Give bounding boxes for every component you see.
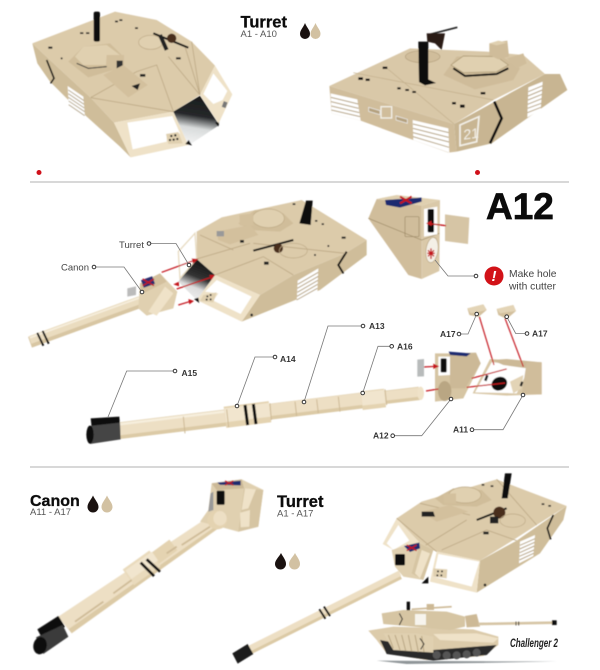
label: A15	[108, 368, 197, 417]
label: A17 right	[505, 315, 548, 338]
label: A14	[235, 354, 296, 408]
divider top	[30, 181, 569, 183]
label: A15: A15	[182, 368, 197, 378]
exploded canon housing parts	[417, 304, 542, 402]
label: A17 left: A17	[440, 329, 456, 339]
label: A11: A11	[453, 424, 468, 434]
turret view 2: 21	[463, 125, 479, 143]
heading: Turret A1-A17: A1 - A17	[277, 508, 313, 520]
assembled turret with canon	[232, 473, 567, 664]
heading: Canon A11-A17: A11 - A17	[30, 507, 71, 518]
callout: make hole with cutter: Make hole	[509, 269, 557, 280]
callout: make hole with cutter: with cutter	[508, 282, 556, 292]
ink drops turret	[275, 553, 300, 570]
label: A11	[453, 393, 525, 434]
heading: A12: A12	[486, 186, 554, 227]
Challenger 2 caption: Challenger 2	[510, 638, 558, 650]
assembled canon	[32, 479, 263, 655]
label: A13: A13	[369, 321, 385, 331]
turret view 1	[32, 12, 232, 157]
label: A12	[373, 397, 453, 440]
heading: Turret A1-A10: A1 - A10	[240, 29, 277, 40]
exploded canon barrel	[86, 387, 424, 444]
heading: Turret A1-A10	[240, 14, 287, 40]
label: A12: A12	[373, 430, 389, 440]
heading: Turret A1-A10: Turret	[240, 14, 287, 32]
label: Turret: Turret	[119, 240, 144, 251]
heading: Canon A11-A17	[30, 493, 80, 518]
red dot left	[36, 170, 42, 175]
label: A16: A16	[397, 342, 413, 352]
turret with canon assembly	[30, 200, 367, 346]
canon part A12 detail	[368, 195, 469, 279]
divider bottom	[30, 466, 569, 468]
ink drops canon	[88, 496, 112, 512]
heading: Turret A1-A17	[277, 493, 324, 520]
label: Canon: Canon	[61, 262, 89, 274]
turret view 2	[329, 27, 567, 153]
label: A13	[302, 321, 385, 404]
label: Canon	[61, 262, 144, 294]
heading: Canon A11-A17: Canon	[30, 493, 80, 510]
red dot right	[475, 170, 480, 175]
heading: Turret A1-A17: Turret	[277, 493, 324, 511]
Challenger 2 tank illustration	[368, 602, 557, 664]
ink drops top	[300, 23, 320, 39]
label: A14: A14	[280, 354, 296, 364]
label: Turret	[119, 240, 191, 267]
label: A17 right: A17	[532, 328, 548, 338]
label: A16	[361, 342, 413, 395]
callout: make hole with cutter: !	[492, 268, 496, 285]
callout: make hole with cutter	[435, 260, 557, 292]
label: A17 left	[440, 312, 479, 339]
